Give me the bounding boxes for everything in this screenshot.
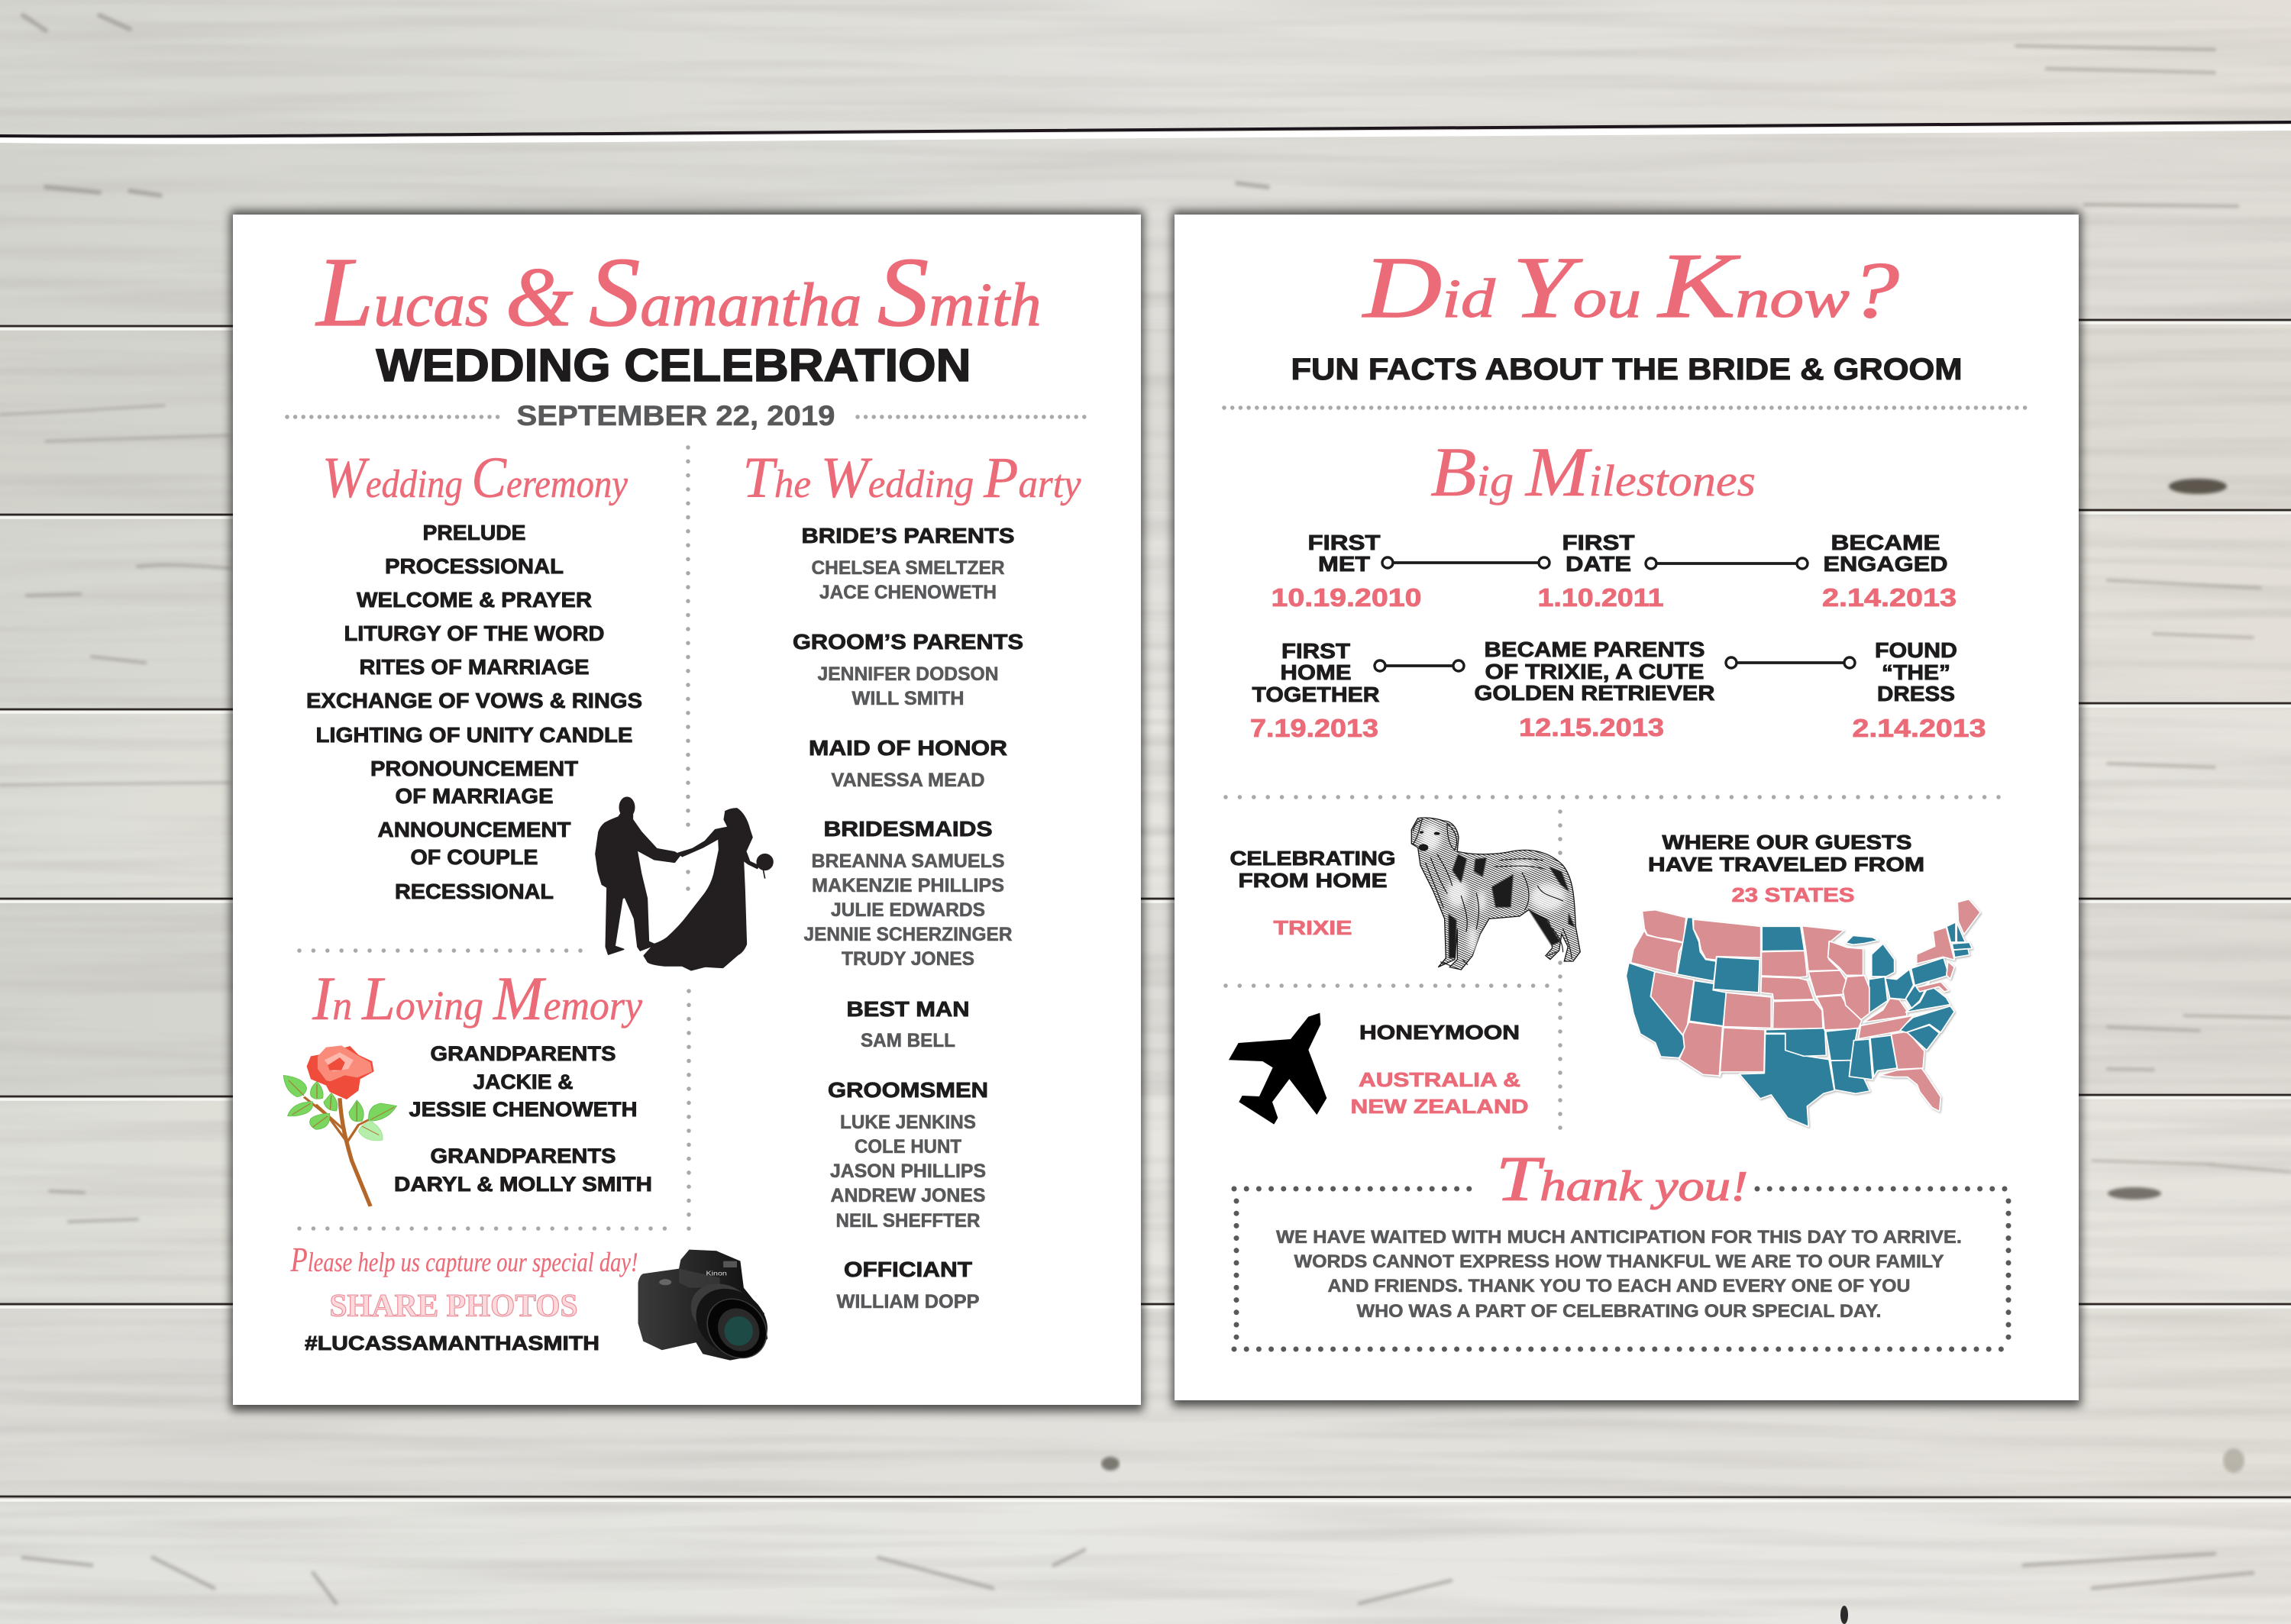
milestone: first home together: TOGETHER xyxy=(1252,683,1379,706)
milestone: found the dress: DRESS xyxy=(1877,682,1955,705)
ceremony order list: PRONOUNCEMENT xyxy=(370,757,578,780)
milestone: became parents: GOLDEN RETRIEVER xyxy=(1474,681,1715,705)
heading: thank you: Thank you! xyxy=(1496,1144,1748,1215)
milestone: first date: FIRST xyxy=(1562,531,1634,554)
timeline connector 4 xyxy=(1726,657,1855,668)
party member names: JASON PHILLIPS xyxy=(830,1161,986,1182)
section: big milestones xyxy=(1250,433,1986,742)
panel: fun facts card xyxy=(1175,215,2079,1400)
party member names: JULIE EDWARDS xyxy=(831,899,985,921)
ceremony order list: RECESSIONAL xyxy=(395,880,554,903)
party role headings: GROOMSMEN xyxy=(828,1078,988,1102)
thank you message: AND FRIENDS. THANK YOU TO EACH AND EVERY ONE OF YOU xyxy=(1327,1276,1911,1296)
card shadows xyxy=(231,211,2081,1411)
text: celebrating from home: TRIXIE xyxy=(1274,916,1352,939)
party member names: TRUDY JONES xyxy=(842,948,974,970)
milestone: found the dress: FOUND xyxy=(1875,638,1957,662)
panel: wedding program card xyxy=(233,215,1141,1405)
party role headings: MAID OF HONOR xyxy=(809,736,1007,760)
section: thank you xyxy=(1234,1144,2011,1349)
icon: camera xyxy=(638,1250,780,1363)
section: honeymoon xyxy=(1229,1013,1529,1125)
timeline connector 2 xyxy=(1646,558,1808,569)
text: honeymoon xyxy=(1350,1021,1529,1118)
timeline connector 3 xyxy=(1375,660,1464,671)
milestone: first met: MET xyxy=(1318,552,1370,576)
icon: golden retriever dog xyxy=(1411,818,1580,970)
text: where our guests traveled from xyxy=(1648,831,1924,906)
milestone: first date xyxy=(1538,531,1663,612)
memorial names: DARYL & MOLLY SMITH xyxy=(394,1173,652,1196)
party role headings: BRIDESMAIDS xyxy=(823,817,993,841)
party member names: BREANNA SAMUELS xyxy=(811,851,1005,872)
milestone: became engaged xyxy=(1822,531,1957,612)
ceremony order list: WELCOME & PRAYER xyxy=(357,588,592,612)
chart: US state map xyxy=(1626,899,1980,1127)
party member names: WILL SMITH xyxy=(852,688,964,709)
heading: big milestones: Big Milestones xyxy=(1430,433,1756,511)
milestone: first date: DATE xyxy=(1566,552,1631,576)
text: where our guests traveled from: 23 STATES xyxy=(1732,883,1854,906)
milestone: found the dress: “THE” xyxy=(1882,660,1950,684)
heading: wedding celebration: WEDDING CELEBRATION xyxy=(376,340,971,391)
section: wedding ceremony xyxy=(306,446,642,903)
milestone: became engaged: BECAME xyxy=(1831,531,1940,554)
memorial names: JACKIE & xyxy=(473,1070,573,1093)
memorial names: GRANDPARENTS xyxy=(431,1145,616,1167)
party role headings: BRIDE’S PARENTS xyxy=(802,524,1014,547)
party member names: ANDREW JONES xyxy=(831,1185,985,1206)
section: celebrating from home xyxy=(1230,818,1580,970)
milestone: became parents: BECAME PARENTS xyxy=(1485,638,1705,661)
milestone: first home together xyxy=(1250,639,1379,742)
party role headings: OFFICIANT xyxy=(844,1258,972,1281)
milestone: became parents: 12.15.2013 xyxy=(1519,713,1664,741)
text: honeymoon: AUSTRALIA & xyxy=(1359,1068,1520,1091)
party member names: CHELSEA SMELTZER xyxy=(811,557,1005,579)
section: wedding party xyxy=(742,446,1081,1312)
party member names: JACE CHENOWETH xyxy=(819,582,997,603)
milestone: found the dress xyxy=(1853,638,1986,742)
party member names: MAKENZIE PHILLIPS xyxy=(812,875,1004,896)
milestone: became parents xyxy=(1474,638,1715,741)
milestone: became engaged: 2.14.2013 xyxy=(1822,583,1957,612)
text: share photos: SHARE PHOTOS xyxy=(330,1289,577,1324)
milestone: first met: 10.19.2010 xyxy=(1271,583,1422,612)
ceremony order list: LIGHTING OF UNITY CANDLE xyxy=(316,723,632,747)
ceremony order list: RITES OF MARRIAGE xyxy=(359,655,590,679)
text: celebrating from home xyxy=(1230,847,1396,939)
icon: bride and groom silhouette xyxy=(596,797,773,970)
milestone: first home together: FIRST xyxy=(1281,639,1350,663)
section: guest map xyxy=(1626,831,1980,1127)
milestone: first met: FIRST xyxy=(1307,531,1381,554)
title: did you know: D id You K now ? xyxy=(1362,234,1899,337)
text: where our guests traveled from: HAVE TRAVELED FROM xyxy=(1648,853,1924,876)
ceremony order list: ANNOUNCEMENT xyxy=(377,818,571,841)
party role headings: GROOM’S PARENTS xyxy=(793,630,1023,654)
milestone: first home together: 7.19.2013 xyxy=(1250,714,1378,742)
dotted frame xyxy=(1234,1189,2011,1349)
memorial names xyxy=(394,1042,652,1196)
text: where our guests traveled from: WHERE OUR GUESTS xyxy=(1662,831,1912,854)
ceremony order list: OF COUPLE xyxy=(411,845,538,869)
text: celebrating from home: FROM HOME xyxy=(1239,869,1387,892)
heading: the wedding party: The Wedding Party xyxy=(742,446,1081,510)
icon: airplane xyxy=(1229,1013,1326,1125)
party member names: SAM BELL xyxy=(861,1030,955,1051)
section: in loving memory xyxy=(283,964,652,1206)
milestone: first date: 1.10.2011 xyxy=(1538,583,1663,612)
timeline connector 1 xyxy=(1382,557,1549,568)
party member names: WILLIAM DOPP xyxy=(837,1291,979,1312)
party member names: COLE HUNT xyxy=(855,1136,961,1157)
party member names: NEIL SHEFFTER xyxy=(835,1210,981,1232)
text: honeymoon: HONEYMOON xyxy=(1359,1021,1520,1044)
title: couple names: Lucas & Samantha Smith xyxy=(315,237,1041,347)
milestone: became engaged: ENGAGED xyxy=(1824,552,1947,576)
icon: red rose xyxy=(283,1045,396,1206)
party member names: LUKE JENKINS xyxy=(840,1112,976,1133)
ceremony order list xyxy=(306,521,642,903)
party member names xyxy=(803,557,1013,1312)
memorial names: JESSIE CHENOWETH xyxy=(409,1098,637,1121)
text: hashtag: #LUCASSAMANTHASMITH xyxy=(305,1332,599,1354)
party member names: JENNIE SCHERZINGER xyxy=(803,924,1013,945)
thank you message: WHO WAS A PART OF CELEBRATING OUR SPECIAL DAY. xyxy=(1356,1301,1882,1322)
section: share photos xyxy=(290,1240,780,1363)
party role headings xyxy=(793,524,1023,1281)
milestone: first met xyxy=(1271,531,1422,612)
milestone: first home together: HOME xyxy=(1280,660,1352,684)
text: honeymoon: NEW ZEALAND xyxy=(1350,1095,1529,1118)
ceremony order list: PRELUDE xyxy=(423,521,525,544)
thank you message: WORDS CANNOT EXPRESS HOW THANKFUL WE ARE TO OUR FAMILY xyxy=(1294,1251,1944,1272)
ceremony order list: PROCESSIONAL xyxy=(385,554,564,578)
thank you message xyxy=(1276,1227,1962,1322)
party member names: JENNIFER DODSON xyxy=(817,663,999,685)
ceremony order list: EXCHANGE OF VOWS & RINGS xyxy=(306,689,642,712)
text: capture request: Please help us capture our special day! xyxy=(290,1240,638,1279)
text: celebrating from home: CELEBRATING xyxy=(1230,847,1396,870)
milestone: found the dress: 2.14.2013 xyxy=(1853,714,1986,742)
heading: in loving memory: In Loving Memory xyxy=(312,964,642,1033)
subtitle: fun facts: FUN FACTS ABOUT THE BRIDE & GROOM xyxy=(1291,353,1963,386)
icon: camera: Kinon xyxy=(706,1270,727,1277)
party member names: VANESSA MEAD xyxy=(831,770,985,791)
milestone: became parents: OF TRIXIE, A CUTE xyxy=(1485,660,1705,683)
thank you message: WE HAVE WAITED WITH MUCH ANTICIPATION FOR THIS DAY TO ARRIVE. xyxy=(1276,1227,1962,1248)
date: SEPTEMBER 22, 2019 xyxy=(516,400,835,431)
ceremony order list: OF MARRIAGE xyxy=(396,784,553,808)
memorial names: GRANDPARENTS xyxy=(431,1042,616,1065)
ceremony order list: LITURGY OF THE WORD xyxy=(344,622,605,645)
heading: wedding ceremony: Wedding Ceremony xyxy=(322,446,628,510)
party role headings: BEST MAN xyxy=(846,997,970,1021)
